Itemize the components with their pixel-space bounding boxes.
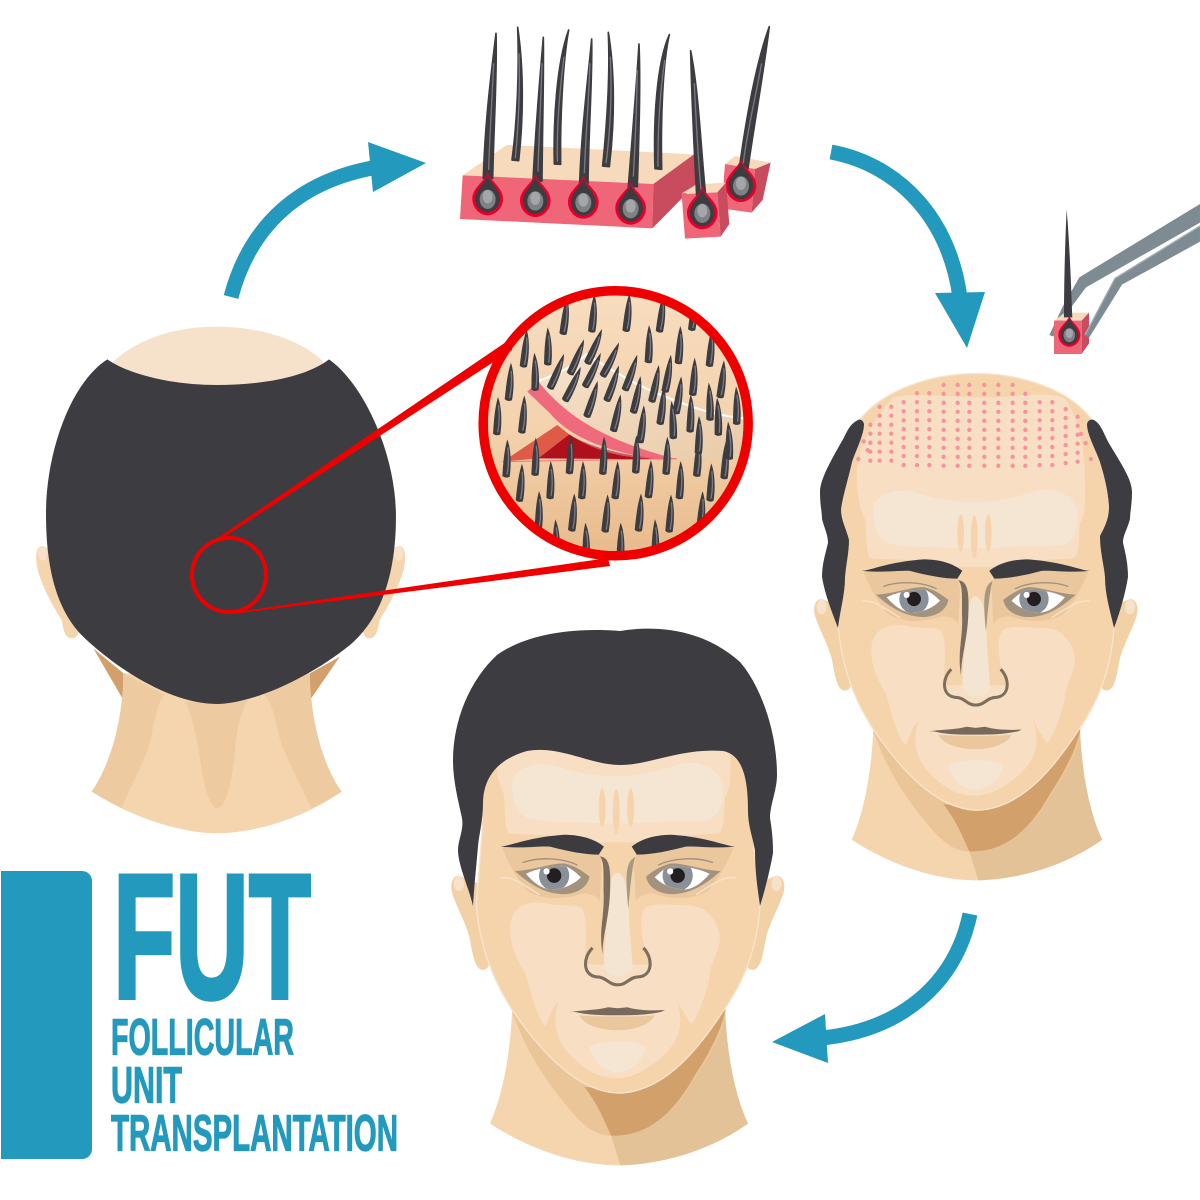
lower connector [236,558,610,613]
neck band shadow [873,728,1080,852]
cheeks and lower face [871,625,1075,796]
arrow: scalp to harvested strip [231,142,426,297]
bald crown [113,327,323,387]
magnified scalp view [487,293,747,561]
back of head [36,327,405,833]
neck shadows [92,648,342,808]
ears [814,599,1138,691]
eye sockets, brows and lids, left [862,559,962,624]
hairs [493,293,741,561]
nostrils [944,669,1007,705]
large ring [483,291,748,556]
follicles [472,172,646,225]
strip side [652,154,697,228]
ear left [36,546,80,638]
chin highlight [948,760,1003,790]
small circle [192,538,266,612]
back row hairs [512,27,669,169]
scalp background [487,295,744,552]
lower lip [938,735,1012,749]
skin strip with hair follicles [460,27,771,239]
eye sockets, brows and lids, right [989,559,1090,624]
nose side lines [958,580,993,675]
neck right shade [969,728,1102,880]
face [451,643,784,1165]
tweezer arm front [1085,226,1200,337]
subtitle line 1: FOLLICULAR [111,1008,294,1066]
graft site dots [858,380,1091,466]
cut graft front [682,51,729,239]
excision and hairs [493,293,747,561]
neck [852,728,1102,880]
neck [92,673,342,833]
arrow: implantation to result [772,914,970,1063]
blue side bar [1,871,92,1159]
chin shadow [943,728,1081,852]
full hair [453,629,777,906]
right iris [1019,584,1049,614]
left iris [899,584,929,614]
forehead light [857,395,1085,567]
tweezers holding graft [1049,204,1200,354]
subtitle line 2: UNIT [111,1056,182,1114]
nose highlight [962,596,990,696]
mouth [929,727,1022,735]
strip top surface [463,145,694,184]
tweezer arm back [1049,204,1200,337]
red zoom callout [192,291,748,613]
cut graft right [722,27,771,213]
young man with restored hair [451,629,784,1165]
wound [503,425,677,462]
strip front [460,175,653,228]
title block [1,837,398,1162]
flap white edge [538,354,743,418]
graft cube [1054,209,1089,354]
lifted skin flap [538,354,747,460]
flap underside [527,382,677,459]
back hair highlights [515,53,665,167]
front hair highlights [489,63,637,177]
frown lines [957,514,992,559]
face base [814,374,1138,880]
front row hairs [483,33,640,187]
heading FUT: FUT [113,837,311,1036]
forehead highlight [873,490,1078,548]
head shape [838,374,1114,810]
bald head with graft sites [814,374,1138,880]
side hair [820,420,1132,628]
upper connector [213,338,512,541]
ear right [361,546,405,638]
hair [46,359,396,704]
arrow: grafts to implantation [831,152,985,348]
subtitle line 3: TRANSPLANTATION [111,1104,398,1162]
